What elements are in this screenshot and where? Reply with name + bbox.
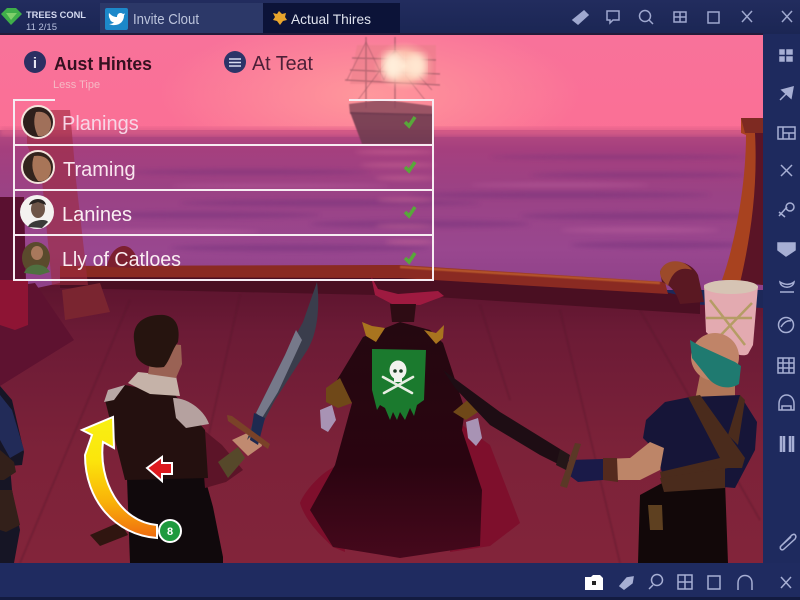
info icon: i — [33, 55, 37, 72]
info heading — [24, 51, 152, 91]
heading text: Aust Hintes — [54, 53, 152, 74]
row: Planings: Planings — [62, 113, 139, 135]
row: Ly of Catloes — [22, 242, 415, 275]
top bar — [0, 0, 800, 35]
neck — [696, 376, 735, 396]
sun reflection — [362, 149, 432, 246]
sea — [0, 127, 763, 290]
row: Ly of Catloes: Lly of Catloes — [62, 249, 181, 271]
cloak — [310, 322, 482, 558]
scroll — [660, 261, 704, 304]
skull banner — [372, 349, 426, 420]
tab: invite: Invite Clout — [133, 12, 199, 28]
tab: actual — [263, 3, 400, 33]
row: Planings — [22, 106, 415, 138]
sleeve — [204, 431, 243, 488]
trousers — [638, 482, 728, 563]
rail post right — [722, 118, 763, 285]
hair — [134, 315, 179, 368]
bandana — [690, 340, 741, 387]
head — [390, 304, 416, 322]
red cape edges — [300, 425, 520, 552]
neck and jaw — [148, 344, 182, 378]
captain — [300, 276, 562, 558]
paper hat — [704, 280, 758, 355]
left edge sailor — [0, 386, 24, 563]
camera icon — [585, 575, 603, 590]
red arrow — [147, 457, 172, 481]
shoulders — [104, 385, 125, 402]
bottom bar — [0, 563, 800, 600]
rail post left — [27, 110, 140, 320]
right sailor — [556, 333, 757, 563]
vest — [105, 385, 208, 480]
captain sword — [443, 370, 562, 466]
epaulettes — [362, 322, 444, 344]
trousers — [127, 478, 223, 563]
row: Traming: Traming — [63, 159, 136, 181]
row: Lanines — [20, 195, 415, 229]
curved yellow arrow — [82, 417, 181, 542]
collar — [128, 372, 180, 396]
app title: TREES CONL — [26, 10, 86, 21]
sidebar icons — [780, 50, 792, 61]
deck — [0, 283, 763, 563]
hilt — [560, 443, 581, 488]
tab: actual: Actual Thires — [291, 11, 371, 27]
cuffs — [326, 378, 478, 420]
logo — [1, 8, 22, 25]
shirt — [643, 395, 757, 488]
ship rail — [60, 265, 700, 314]
left swordsman — [90, 282, 318, 563]
hands — [320, 405, 482, 446]
second heading — [224, 51, 313, 75]
arm — [617, 442, 664, 480]
toolbar icons — [573, 10, 792, 24]
row: Lanines: Lanines — [62, 204, 132, 226]
tab: invite — [100, 3, 263, 33]
right sidebar — [763, 34, 800, 564]
second heading: At Teat — [252, 53, 313, 75]
row: Traming — [22, 151, 415, 183]
red cloth left — [0, 197, 74, 386]
app date: 11 2/15 — [26, 22, 57, 33]
green badge: 8 — [167, 526, 173, 538]
subheading: Less Tipe — [53, 79, 100, 91]
sky — [0, 35, 763, 130]
list panel — [14, 100, 433, 280]
ghost ship — [345, 37, 440, 144]
straps — [660, 395, 745, 482]
bottom toolbar icons — [620, 574, 791, 590]
boot — [90, 522, 128, 546]
head — [691, 333, 739, 381]
sword — [247, 282, 318, 440]
hat — [371, 276, 444, 305]
